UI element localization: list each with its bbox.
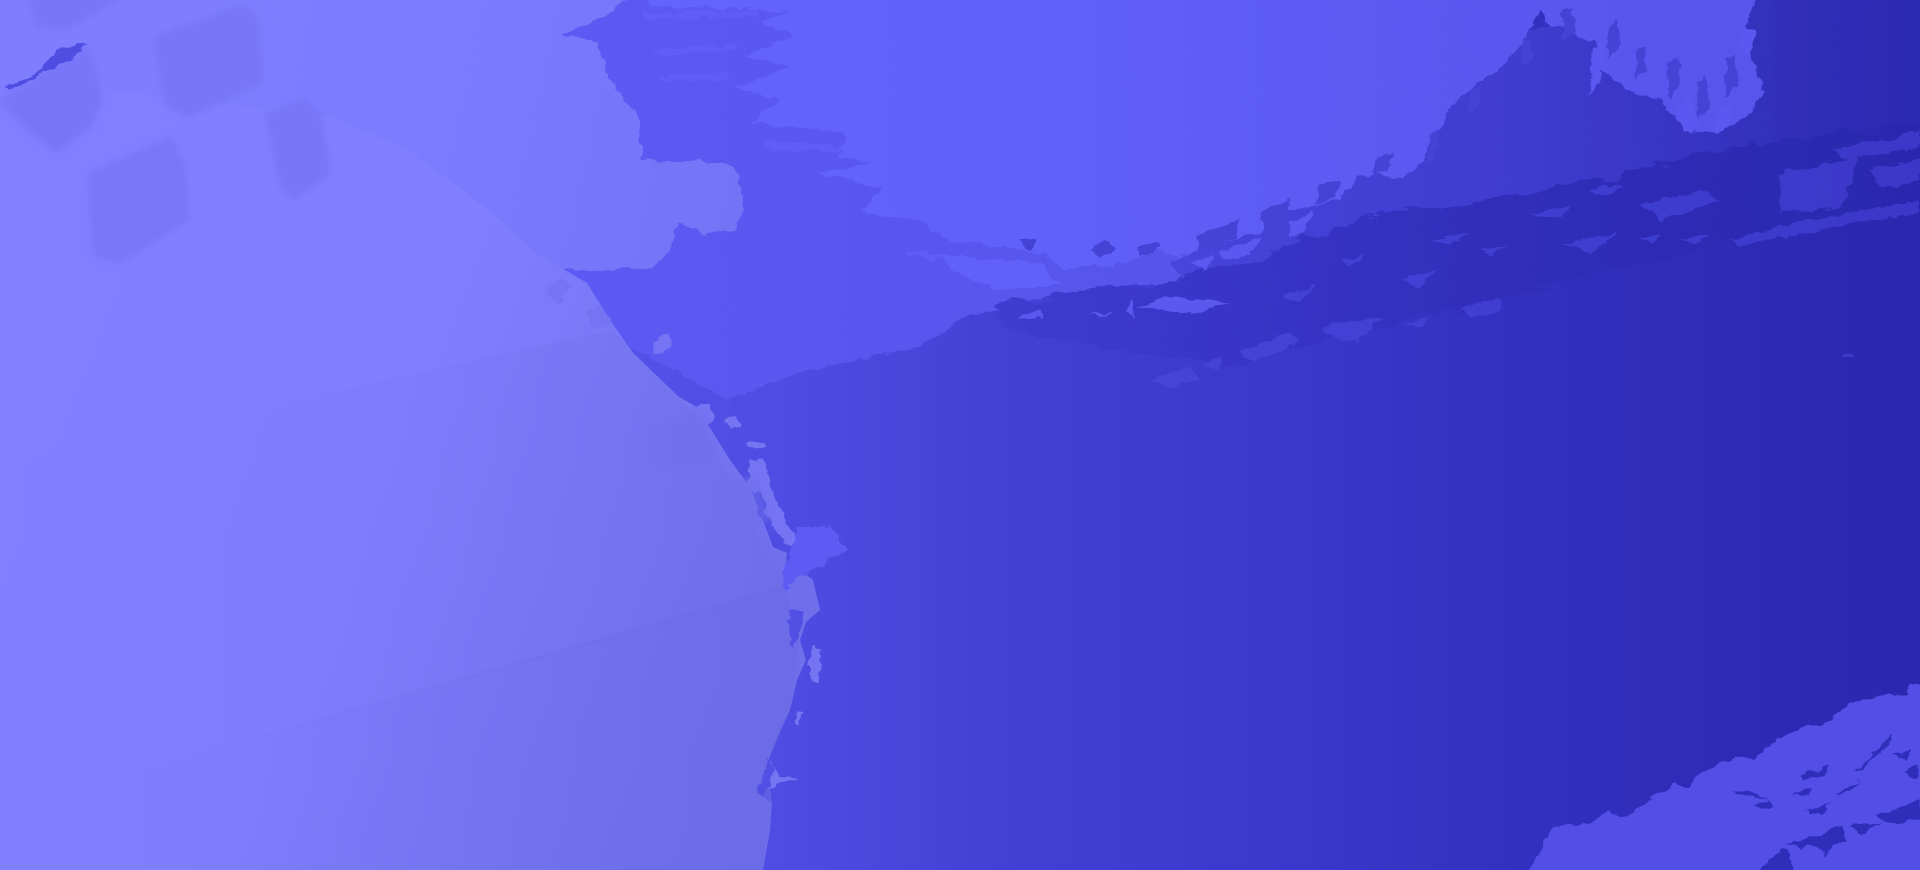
dark streak band [1000,120,1920,367]
paw spot 3 [89,137,189,263]
faint paw spots near edge [648,410,772,530]
wedge: upper-right lighter brush [1170,0,1920,290]
small light speck [1843,354,1853,357]
bright fragments on the streak edge [1017,297,1230,320]
paw spot 1 [0,43,102,153]
bright flecks on the wedge [1190,28,1756,270]
mid-tone brush band [500,0,1300,400]
wedge-coloured flecks on the bright stroke [1020,8,1738,260]
dark flecks on bottom-right stroke [1732,735,1920,870]
dark mark on paw spot 1 [5,43,87,91]
lower shading band 2 [0,585,800,870]
paw spot 5 [26,0,128,30]
bright notch on light edge [782,527,847,592]
bottom-right brush stroke [1524,683,1920,870]
paw spot 2 [153,3,263,118]
upper light blob [0,0,745,270]
brush fragments along light edge [546,278,822,792]
lower shading band 1 [0,330,790,810]
paw spots [0,0,332,263]
dry brush streaks in the mid band [640,10,950,262]
large light brush shape [0,90,820,870]
paw spot 4 [265,98,332,200]
streak: lighter patches in dark band [1150,132,1920,388]
dark edge chips [751,490,804,795]
bright top brush stroke [640,0,1764,290]
